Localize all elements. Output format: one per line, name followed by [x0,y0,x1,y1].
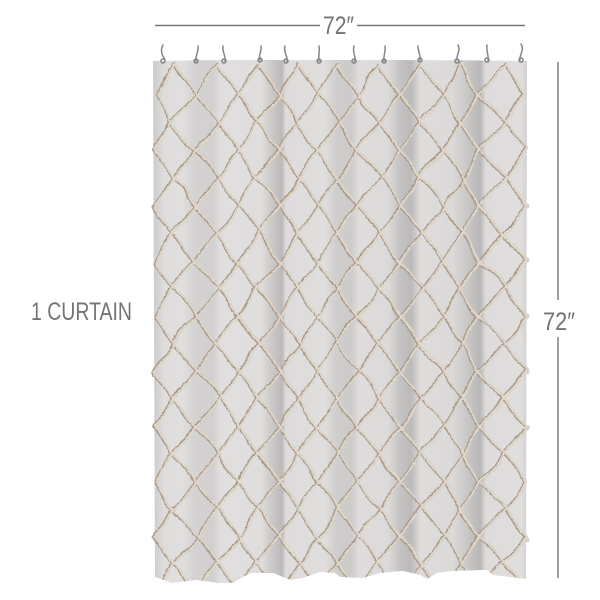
bottom edge mask [150,570,535,600]
height label: 72″ [543,308,575,336]
curtain fabric with folds [153,60,527,583]
chenille lattice pattern [155,65,527,591]
height line bottom [557,337,559,578]
width label: 72″ [323,12,354,40]
edge knots [524,204,530,542]
width line right [357,24,525,26]
height line top [557,62,559,300]
quantity label: 1 CURTAIN [31,298,132,326]
curtain panel [150,60,535,600]
curtain hooks [161,44,523,63]
width line left [155,24,320,26]
